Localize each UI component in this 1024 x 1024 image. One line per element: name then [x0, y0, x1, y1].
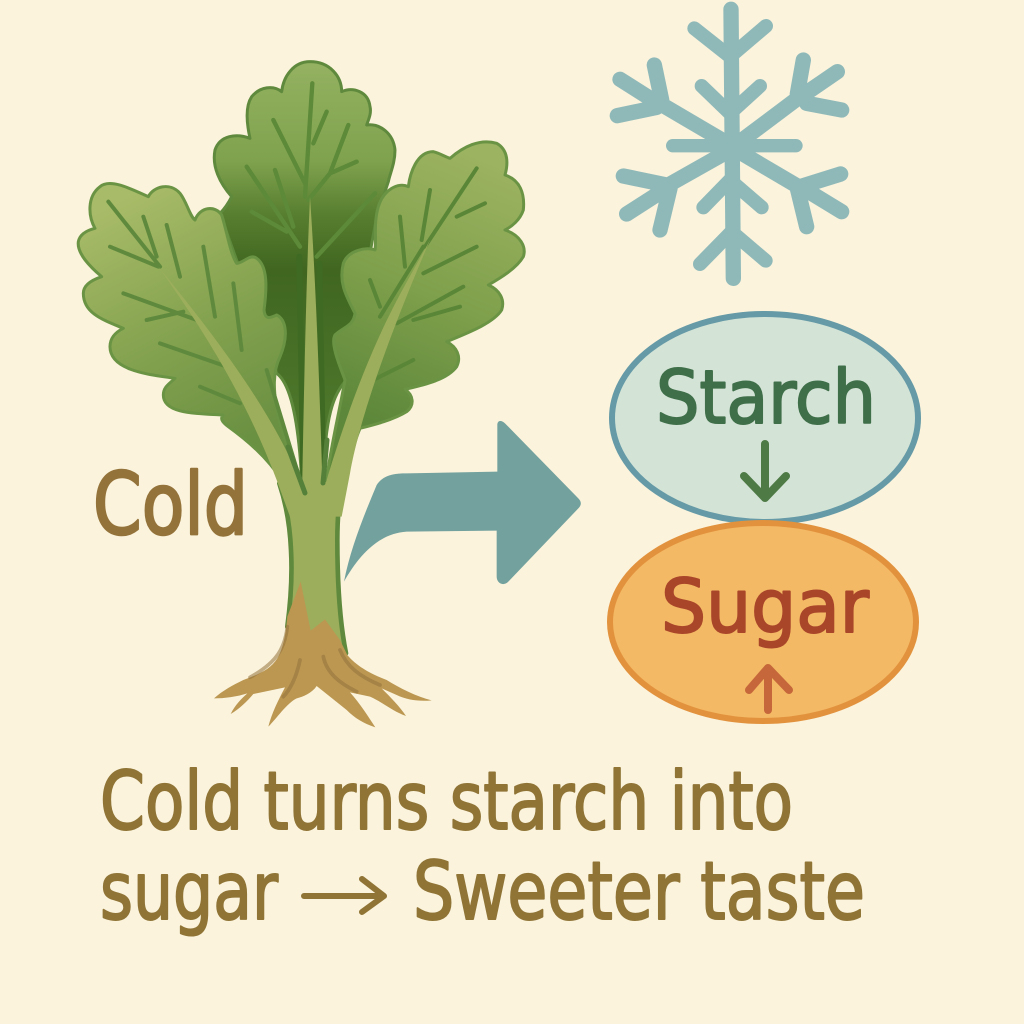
- caption line two: [100, 845, 865, 938]
- root shading: [250, 627, 380, 697]
- arrow in caption: [304, 879, 384, 912]
- trunk edge lines: [279, 477, 346, 653]
- left leaf veins: [108, 202, 300, 480]
- label: Sugar: Sugar: [661, 564, 870, 650]
- stem junction wedges: [288, 440, 327, 493]
- arrow: plant to starch and sugar: [344, 421, 581, 584]
- caption line two: sugar: [100, 845, 278, 938]
- label: Starch: Starch: [656, 355, 876, 441]
- trunk: [279, 477, 347, 655]
- caption line one: Cold turns starch into: [100, 755, 793, 848]
- icon: snowflake: [617, 9, 842, 278]
- plant: leafy green with roots: [78, 62, 524, 727]
- icon: up arrow: [749, 668, 789, 710]
- leaves: [78, 62, 524, 517]
- right leaf veins: [370, 168, 485, 380]
- trunk and roots: [214, 477, 432, 727]
- stems: [158, 197, 430, 517]
- ellipse: starch: [612, 314, 918, 522]
- icon: down arrow: [744, 444, 786, 498]
- left leaf: [78, 184, 300, 480]
- roots: [214, 582, 432, 727]
- back centre leaf: [214, 62, 395, 480]
- centre leaf veins: [247, 83, 375, 480]
- label: Cold: Cold: [93, 455, 248, 555]
- caption line two: Sweeter taste: [413, 845, 865, 938]
- right leaf: [327, 142, 524, 480]
- ellipse: sugar: [610, 523, 916, 721]
